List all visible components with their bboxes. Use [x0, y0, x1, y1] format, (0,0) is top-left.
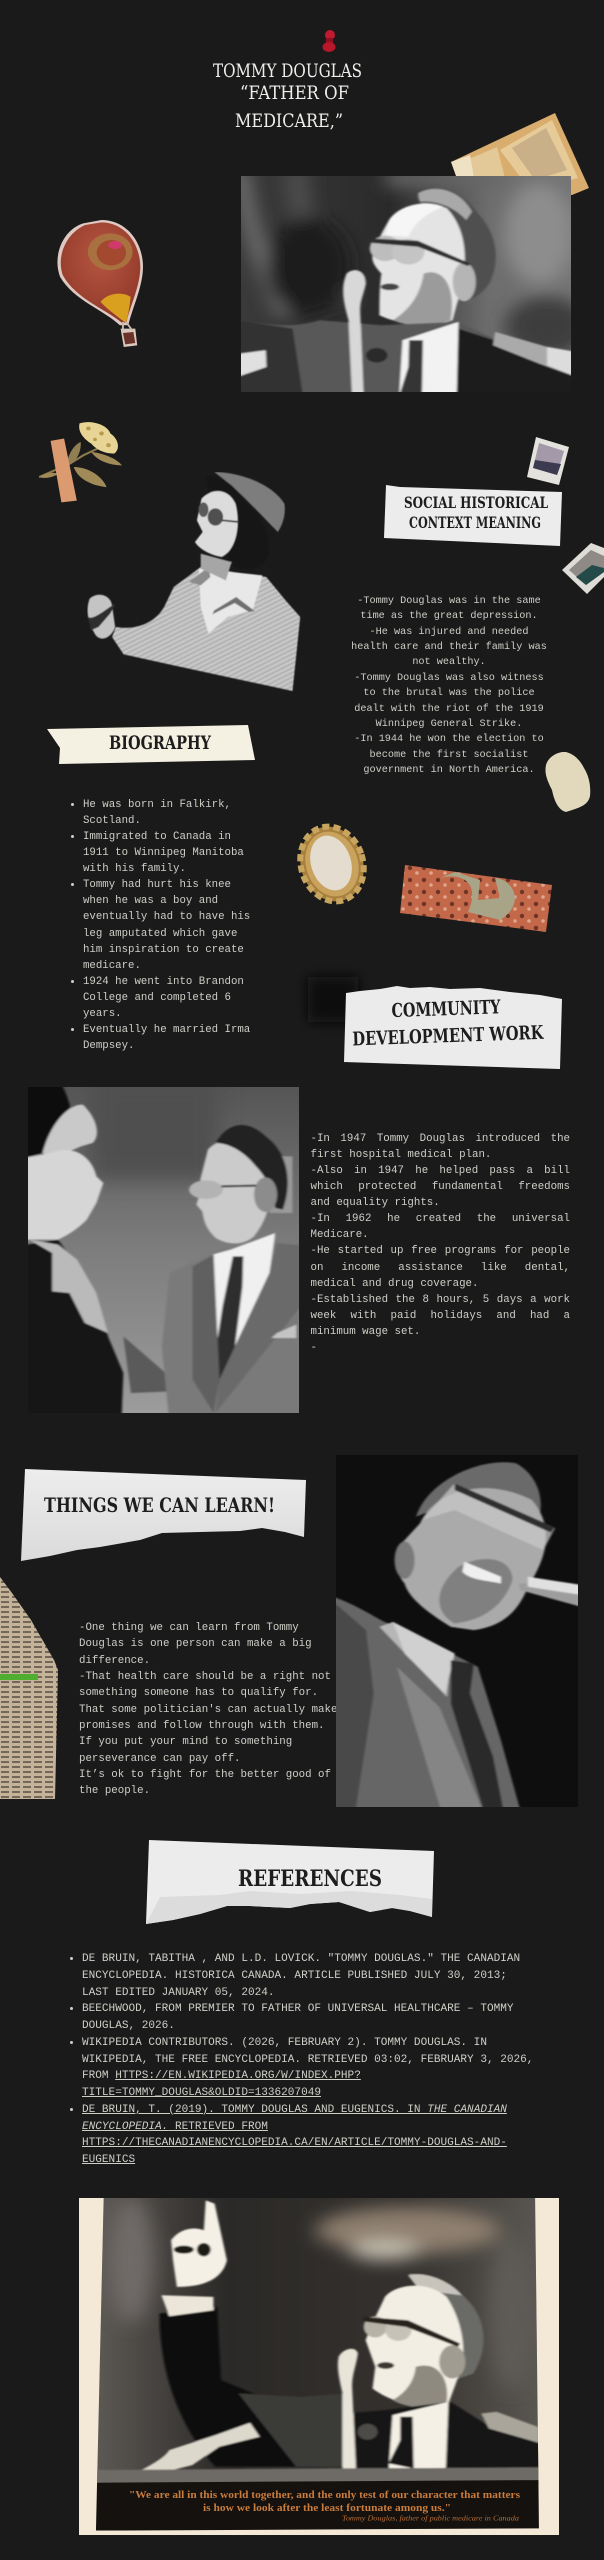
text: biography list: Eventually he married Irma — [83, 1024, 250, 1036]
icon: hot air balloon — [57, 220, 143, 347]
text: biography list: Scotland. — [83, 815, 141, 827]
photo: quote poster of Tommy Douglas with raised finger — [79, 2198, 559, 2535]
panel label: references: REFERENCES — [238, 1866, 382, 1892]
text: biography list: 1924 he went into Brandon — [83, 976, 244, 988]
text: things we can learn: the people. — [79, 1785, 150, 1797]
text: things we can learn: If you put your mind to something — [79, 1736, 292, 1748]
text: community development work: first hospital medical plan. — [310, 1149, 491, 1161]
text: references list: WIKIPEDIA, THE FREE ENCYCLOPEDIA. RETRIEVED 03:02, FEBRUARY 3, 2026, — [82, 2054, 533, 2066]
text: things we can learn: That some politician's can actually make — [79, 1704, 337, 1716]
panel label: references — [146, 1840, 434, 1924]
icon: red pushpin — [322, 30, 336, 52]
title: MEDICARE,” — [235, 110, 343, 132]
text: community development work: -Also in 1947 he helped pass a bill — [310, 1165, 570, 1177]
text: biography list: leg amputated which gave — [83, 928, 237, 940]
text: community development work: -In 1962 he created the universal — [310, 1213, 570, 1225]
text: things we can learn: -That health care should be a right not — [79, 1671, 331, 1683]
text: references list: LAST EDITED JANUARY 05, 2024. — [82, 1986, 275, 1998]
quote text: "We are all in this world together, and the only test of our character that matters — [129, 2490, 520, 2501]
text: social historical context: -Tommy Douglas was in the same — [357, 596, 541, 607]
text: biography list: with his family. — [83, 863, 186, 875]
text: social historical context: become the first socialist — [370, 750, 528, 761]
text: community development work: and equality rights. — [310, 1197, 440, 1209]
text: things we can learn — [79, 1622, 337, 1797]
text: biography list: Immigrated to Canada in — [83, 831, 231, 843]
text: biography list: Dempsey. — [83, 1040, 134, 1052]
text: social historical context: health care and their family was — [351, 642, 547, 653]
text: social historical context: -He was injured and needed — [370, 627, 528, 638]
text: biography list: eventually had to have his — [83, 911, 250, 923]
text: references list: DOUGLAS, 2026. — [82, 2020, 175, 2032]
text: social historical context: government in North America. — [363, 765, 535, 776]
text: biography list — [71, 799, 250, 1052]
icon: gold oval mirror — [297, 824, 367, 904]
icon: torn newspaper clipping — [0, 1577, 58, 1799]
text: references list: BEECHWOOD, FROM PREMIER TO FATHER OF UNIVERSAL HEALTHCARE – TOMMY — [82, 2003, 514, 2015]
text: social historical context: time as the great depression. — [360, 611, 538, 622]
text: biography list: years. — [83, 1008, 122, 1020]
text: community development work: -Established the 8 hours, 5 days a work — [310, 1294, 570, 1306]
photo: Tommy Douglas smiling at a microphone — [336, 1455, 578, 1807]
quote text — [129, 2490, 520, 2522]
text: social historical context: to the brutal was the police — [363, 688, 535, 699]
photo: woman in hat and sunglasses — [87, 472, 301, 692]
text: social historical context: not wealthy. — [412, 657, 486, 668]
text: biography list: He was born in Falkirk, — [83, 799, 231, 811]
text: social historical context: dealt with the riot of the 1919 — [354, 704, 544, 715]
text: references list: FROM HTTPS://EN.WIKIPEDIA.ORG/W/INDEX.PHP? — [82, 2070, 361, 2082]
text: community development work: on income assistance like dental, — [310, 1262, 570, 1274]
photo: Tommy Douglas speaking at microphones — [241, 176, 571, 392]
text: things we can learn: perseverance can pay off. — [79, 1753, 241, 1765]
panel label: biography — [47, 725, 255, 764]
text: community development work: - — [310, 1342, 317, 1354]
text: biography list: him inspiration to create — [83, 944, 244, 956]
photo: Tommy Douglas talking with a woman — [28, 1087, 299, 1413]
icon: patterned fabric strip — [400, 865, 552, 932]
panel label: community development work — [344, 986, 562, 1069]
title — [213, 60, 362, 132]
icon: second polaroid photo — [562, 543, 604, 594]
text: biography list: Tommy had hurt his knee — [83, 879, 231, 891]
text: community development work: minimum wage set. — [310, 1326, 420, 1338]
text: references list: DE BRUIN, TABITHA , AND L.D. LOVICK. "TOMMY DOUGLAS." THE CANADIAN — [82, 1953, 520, 1965]
quote text: Tommy Douglas, father of public medicare in Canada — [342, 2514, 520, 2522]
text: community development work: -In 1947 Tommy Douglas introduced the — [310, 1133, 570, 1145]
text: references list: WIKIPEDIA CONTRIBUTORS. (2026, FEBRUARY 2). TOMMY DOUGLAS. IN — [82, 2037, 487, 2049]
title: “FATHER OF — [240, 82, 349, 104]
icon: pressed flower with tape — [39, 422, 122, 502]
text: things we can learn: difference. — [79, 1655, 150, 1667]
text: things we can learn: Douglas is one person can make a big — [79, 1638, 312, 1650]
text: biography list: 1911 to Winnipeg Manitoba — [83, 847, 244, 859]
panel label: biography: BIOGRAPHY — [109, 732, 211, 754]
icon: torn dotted paper — [545, 752, 590, 812]
panel label: community development work: COMMUNITY — [391, 996, 501, 1022]
panel label: social historical context meaning — [384, 485, 562, 546]
text: things we can learn: something someone has to qualify for. — [79, 1687, 318, 1699]
text: social historical context: -Tommy Douglas was also witness — [354, 673, 544, 684]
text: social historical context: Winnipeg General Strike. — [376, 719, 522, 730]
text: things we can learn: promises and follow through with them. — [79, 1720, 324, 1732]
text: things we can learn: It’s ok to fight for the better good of — [79, 1769, 331, 1781]
icon: book — [451, 113, 589, 195]
text: references list: ENCYCLOPEDIA. RETRIEVED FROM — [82, 2120, 268, 2132]
text: references list: DE BRUIN, T. (2019). TOMMY DOUGLAS AND EUGENICS. IN THE CANADIAN — [82, 2104, 507, 2116]
text: community development work: week with paid holidays and had a — [310, 1310, 570, 1322]
text: references list: TITLE=TOMMY_DOUGLAS&OLDID=1336207049 — [82, 2087, 321, 2099]
text: social historical context: -In 1944 he won the election to — [354, 734, 544, 745]
text: references list: EUGENICS — [82, 2154, 135, 2166]
text: references list: ENCYCLOPEDIA. HISTORICA CANADA. ARTICLE PUBLISHED JULY 30, 2013; — [82, 1970, 507, 1982]
text: community development work: Medicare. — [310, 1229, 369, 1241]
text: social historical context — [351, 596, 547, 776]
text: community development work: which protected fundamental freedoms — [310, 1181, 570, 1193]
text: biography list: when he was a boy and — [83, 895, 218, 907]
text: community development work: -He started up free programs for people — [310, 1245, 570, 1257]
decorative shadow block — [306, 974, 360, 1024]
text: references list — [70, 1953, 533, 2166]
panel label: things we can learn — [21, 1469, 306, 1561]
text: biography list: College and completed 6 — [83, 992, 231, 1004]
text: references list: HTTPS://THECANADIANENCYCLOPEDIA.CA/EN/ARTICLE/TOMMY-DOUGLAS-AND- — [82, 2137, 507, 2149]
text: biography list: medicare. — [83, 960, 141, 972]
icon: polaroid photo — [527, 437, 569, 485]
text: community development work — [310, 1133, 570, 1354]
text: things we can learn: -One thing we can learn from Tommy — [79, 1622, 299, 1634]
text: community development work: medical and drug coverage. — [310, 1278, 478, 1290]
quote text: is how we look after the least fortunate among us." — [203, 2503, 451, 2514]
